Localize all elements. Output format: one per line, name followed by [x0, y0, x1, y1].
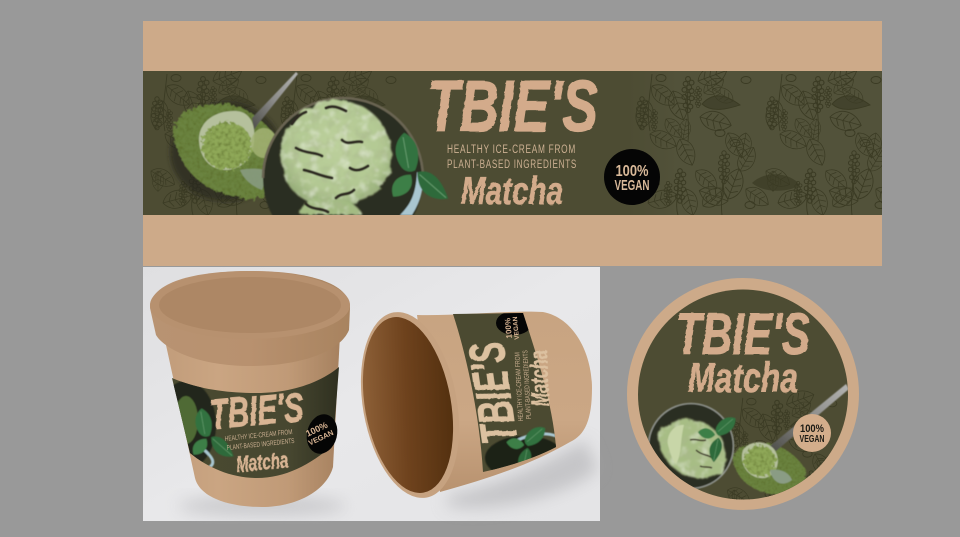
label brand name: TBIE'S — [208, 383, 305, 438]
powder heap — [733, 443, 806, 496]
bowl — [262, 99, 422, 215]
label flavour name: Matcha — [235, 448, 289, 477]
mint leaves — [392, 133, 448, 199]
botanical pattern: left and right — [147, 62, 903, 217]
label tagline: PLANT-BASED INGREDIENTS — [522, 350, 533, 419]
tagline: PLANT-BASED INGREDIENTS — [447, 159, 577, 171]
tub body — [166, 335, 340, 507]
tub shadows — [178, 440, 598, 516]
lid olive disc — [638, 290, 848, 500]
lid photo — [648, 384, 848, 500]
upright tub — [150, 271, 350, 507]
pattern — [727, 390, 837, 500]
tipped tub — [360, 312, 592, 498]
lid badge: 100% — [800, 423, 824, 435]
badge: 100% vegan: VEGAN — [614, 177, 650, 194]
panel: flat label artwork — [143, 21, 903, 266]
label brand name: TBIE'S — [458, 338, 528, 447]
tub rim — [347, 304, 473, 506]
tub interior — [350, 310, 466, 500]
lid flavour name: Matcha — [688, 354, 798, 401]
ice-cream scoop — [658, 419, 727, 479]
label badge: 100% — [503, 318, 514, 339]
lid badge — [793, 414, 831, 452]
panel: tub mockup photo — [143, 267, 600, 521]
ice-cream scoop — [281, 100, 392, 211]
olive label band — [143, 71, 882, 215]
mint — [698, 417, 736, 462]
label badge: VEGAN — [512, 316, 521, 340]
flavour name: Matcha — [461, 170, 563, 213]
label tagline — [514, 350, 533, 421]
label tagline: HEALTHY ICE-CREAM FROM — [514, 352, 525, 421]
label wrap — [453, 313, 556, 472]
label paper strip — [143, 21, 882, 266]
tub body — [417, 312, 592, 492]
photo: matcha ice-cream and spoon — [168, 72, 448, 215]
label badge — [303, 411, 341, 457]
lid — [150, 271, 350, 366]
lid badge: VEGAN — [800, 434, 824, 445]
label badge — [496, 313, 528, 340]
spoon — [770, 384, 849, 451]
badge: 100% vegan — [604, 149, 660, 205]
label badge: 100% — [304, 420, 329, 439]
tagline — [447, 144, 577, 171]
label tagline: PLANT-BASED INGREDIENTS — [226, 438, 295, 452]
label tagline — [224, 429, 295, 452]
label wrap — [172, 367, 339, 478]
label photo crop — [174, 382, 234, 468]
powder shadow — [170, 102, 282, 202]
bowl — [648, 403, 734, 489]
label flavour name: Matcha — [525, 350, 555, 407]
label tagline: HEALTHY ICE-CREAM FROM — [224, 429, 293, 443]
badge: 100% vegan: 100% — [616, 163, 648, 180]
brand name: TBIE'S — [427, 67, 598, 147]
panel: round lid label — [627, 278, 859, 534]
lid brand name: TBIE'S — [676, 302, 810, 367]
tagline: HEALTHY ICE-CREAM FROM — [447, 144, 576, 156]
matcha powder heap — [174, 104, 286, 199]
label photo crop — [484, 426, 556, 470]
scoop of powder — [199, 72, 298, 170]
studio backdrop — [143, 267, 600, 521]
label badge: VEGAN — [307, 428, 335, 447]
lid paper ring — [627, 278, 859, 510]
